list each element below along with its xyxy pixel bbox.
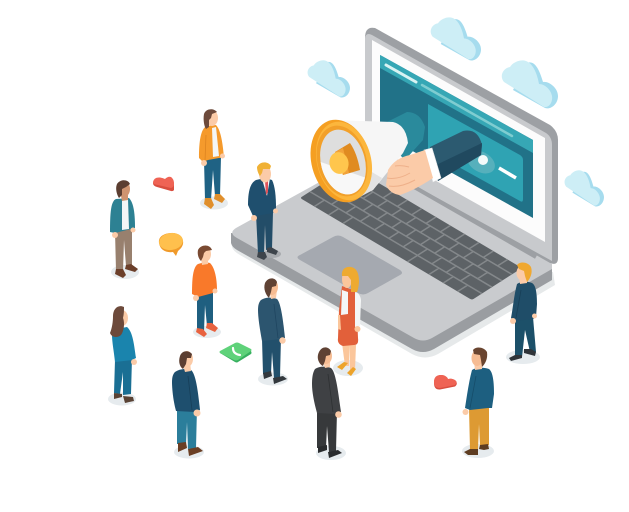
person: woman in red dress (333, 267, 363, 376)
cloud right large (502, 60, 558, 108)
keyboard (300, 166, 522, 300)
laptop (231, 28, 558, 357)
arm and megaphone (310, 112, 482, 202)
megaphone bell (310, 120, 372, 202)
cuff (424, 148, 441, 182)
heart top left (153, 177, 174, 191)
person: man in teal cardigan (110, 180, 139, 279)
person: woman in orange jacket (199, 109, 228, 210)
person: man in black suit (312, 347, 346, 460)
megaphone cone (328, 120, 408, 200)
laptop base (231, 157, 555, 358)
trackpad (298, 236, 402, 294)
hand (386, 150, 433, 195)
heart bottom right (434, 375, 457, 390)
person: man in suit on laptop (248, 162, 281, 260)
person: man on right in navy suit (506, 263, 540, 364)
cloud left (308, 60, 350, 98)
screen teal display (380, 55, 533, 218)
laptop screen (365, 28, 558, 264)
megaphone cone shadow (358, 168, 382, 198)
isometric illustration (108, 17, 604, 460)
person: man in blue sweater and yellow trousers (462, 348, 494, 458)
person: woman in blue top (108, 306, 137, 406)
teal inner sleeve (387, 112, 425, 160)
cloud far right (565, 170, 604, 207)
person: man in navy suit (258, 278, 288, 386)
cloud top (431, 17, 481, 60)
person: man in navy sweater with teal trousers (172, 351, 204, 458)
sleeve (430, 131, 482, 181)
speech bubble (158, 231, 184, 256)
phone card (220, 342, 252, 362)
person: man in orange sweater (192, 246, 221, 338)
